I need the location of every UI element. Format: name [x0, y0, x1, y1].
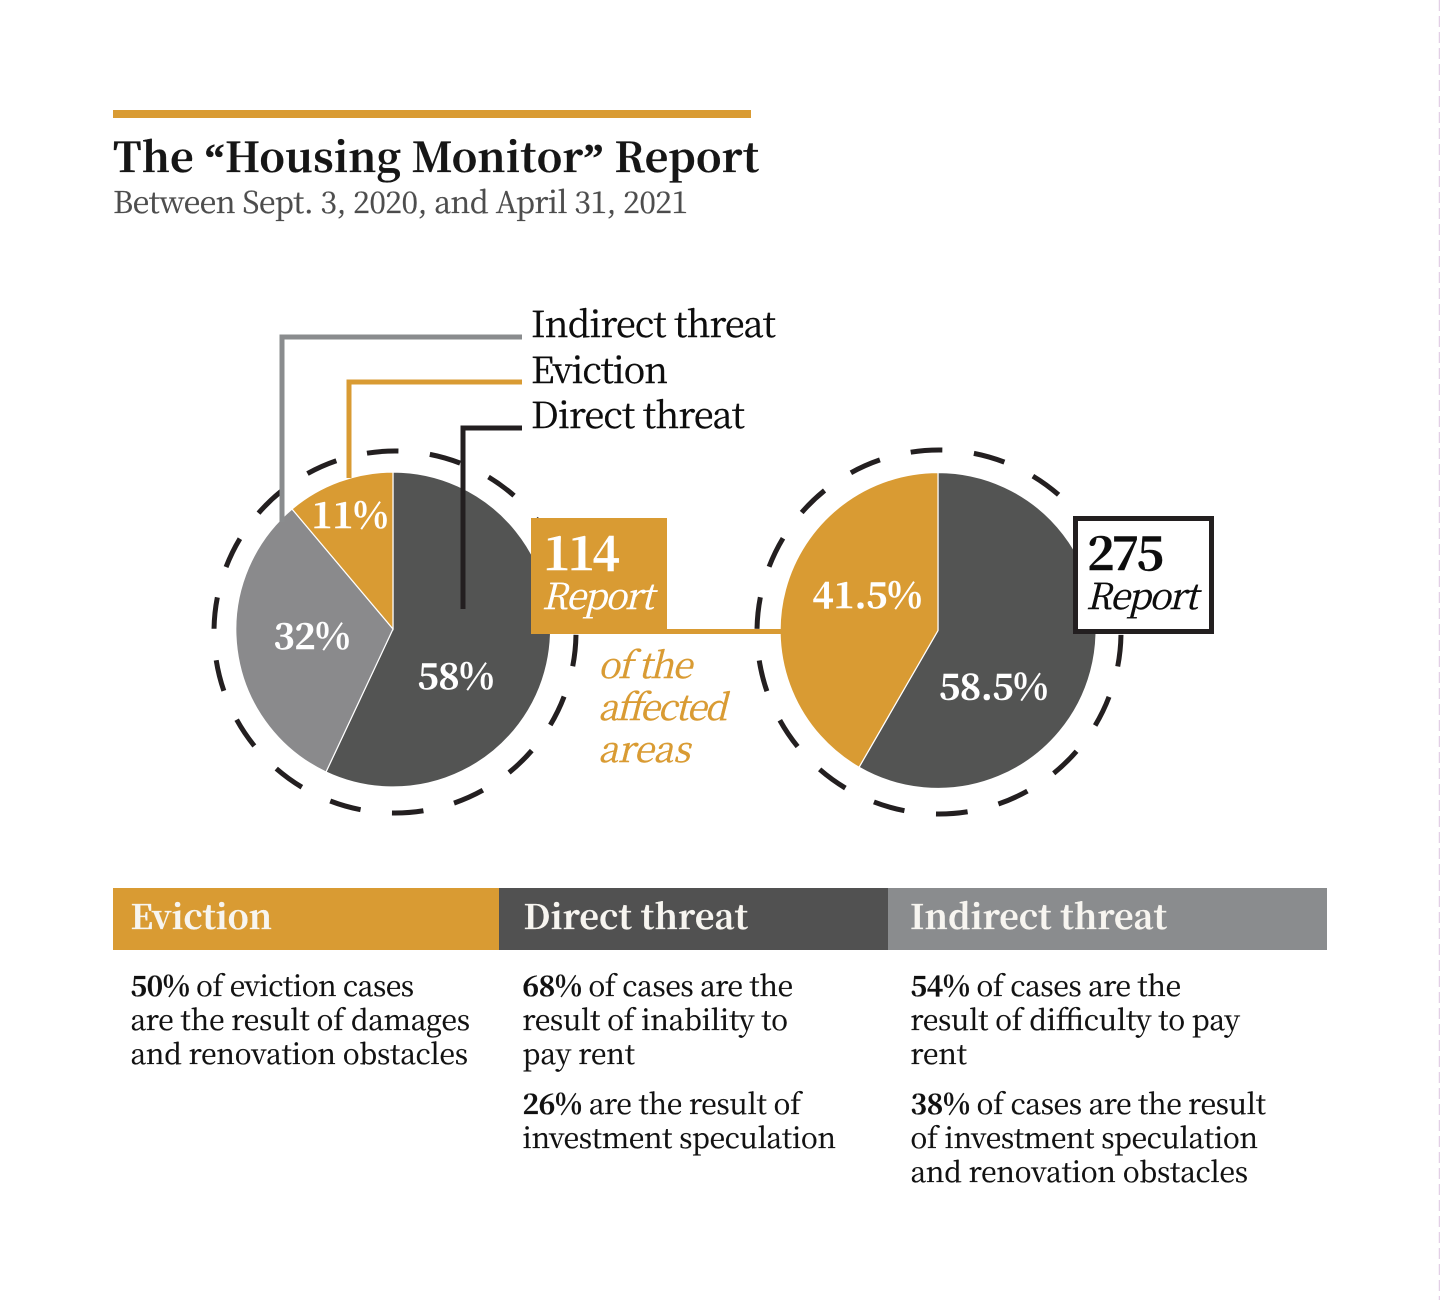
text column: indirect threat: 38% of cases are the result [910, 1083, 1266, 1123]
text column: indirect threat: of investment speculation [910, 1117, 1258, 1157]
text column: direct threat: investment speculation [522, 1117, 836, 1157]
panel header: eviction [113, 888, 500, 950]
text column: direct threat: pay rent [522, 1033, 635, 1073]
text column: direct threat: 26% are the result of [522, 1083, 803, 1123]
percentage labels: 58.5% [939, 660, 1048, 710]
subtitle: Between Sept. 3, 2020, and April 31, 2021 [113, 178, 688, 222]
title: The “Housing Monitor” Report [113, 125, 759, 184]
panel header: direct threat [499, 888, 889, 950]
text column: direct threat: result of inability to [522, 999, 788, 1039]
percentage labels [274, 488, 1048, 710]
text column: eviction: are the result of damages [130, 999, 470, 1039]
caption: of the affected areas: affected [598, 680, 730, 731]
connector line between pies [660, 629, 782, 634]
panel header: eviction: Eviction [130, 890, 272, 939]
callout: 275 report: Report [1086, 569, 1202, 620]
callout: 114 report [531, 517, 667, 634]
legend labels: Direct threat [531, 388, 745, 439]
text column: eviction: and renovation obstacles [130, 1033, 468, 1073]
text column: indirect threat: and renovation obstacles [910, 1151, 1248, 1191]
right pie chart: 275 reports [754, 447, 1124, 817]
left pie chart: 114 reports [211, 448, 579, 816]
percentage labels: 32% [274, 609, 350, 660]
text column: direct threat: 68% of cases are the [522, 965, 793, 1005]
caption: of the affected areas [598, 638, 730, 773]
heading block [113, 110, 759, 222]
callout: 275 report: 275 [1087, 517, 1164, 584]
text column: indirect threat: result of difficulty to pay [910, 999, 1241, 1039]
legend labels: Eviction [531, 343, 668, 394]
text column: indirect threat [910, 965, 1266, 1191]
panel header: indirect threat [888, 888, 1327, 950]
panel header: direct threat: Direct threat [524, 890, 749, 939]
callout: 114 report: Report [542, 569, 658, 620]
panel header: indirect threat: Indirect threat [910, 890, 1168, 939]
percentage labels: 11% [312, 488, 388, 539]
callout: 114 report: 114 [543, 517, 620, 584]
percentage labels: 58% [418, 649, 494, 700]
legend labels [531, 297, 776, 439]
percentage labels: 41.5% [812, 568, 922, 619]
legend leader lines [282, 337, 522, 609]
text column: indirect threat: 54% of cases are the [910, 965, 1181, 1005]
caption: of the affected areas: areas [598, 722, 692, 773]
legend labels: Indirect threat [531, 297, 776, 348]
callout: 275 report [1076, 517, 1212, 632]
text column: eviction [130, 965, 470, 1073]
text column: direct threat [522, 965, 836, 1157]
text column: indirect threat: rent [910, 1033, 967, 1073]
caption: of the affected areas: of the [598, 638, 695, 689]
text column: eviction: 50% of eviction cases [130, 965, 414, 1005]
